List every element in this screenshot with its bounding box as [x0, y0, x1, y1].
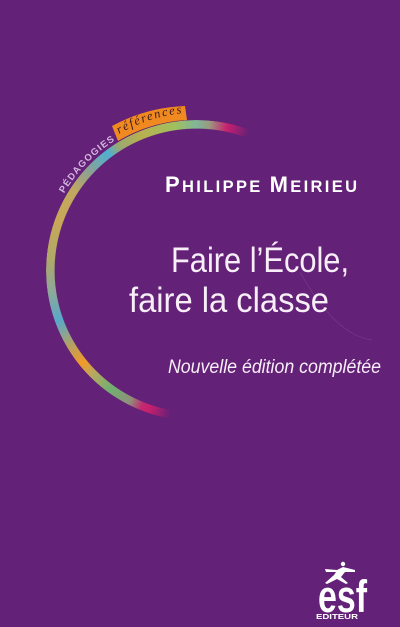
logotype: esf — [318, 571, 368, 622]
publisher logo: esf editeur — [316, 562, 368, 622]
title: faire la classe — [129, 281, 329, 320]
title: Faire l’École, — [171, 241, 349, 280]
rainbow arc — [46, 120, 248, 418]
author: PHILIPPE MEIRIEU — [165, 172, 357, 197]
subtitle: Nouvelle édition complétée — [168, 357, 381, 378]
editeur label: EDITEUR — [316, 612, 359, 621]
icon: leaping figure — [325, 562, 355, 584]
orange band: références: références — [116, 108, 181, 134]
scratch mark — [300, 272, 372, 340]
title — [129, 241, 349, 320]
series label: PÉDAGOGIES: PÉDAGOGIES — [58, 136, 114, 193]
